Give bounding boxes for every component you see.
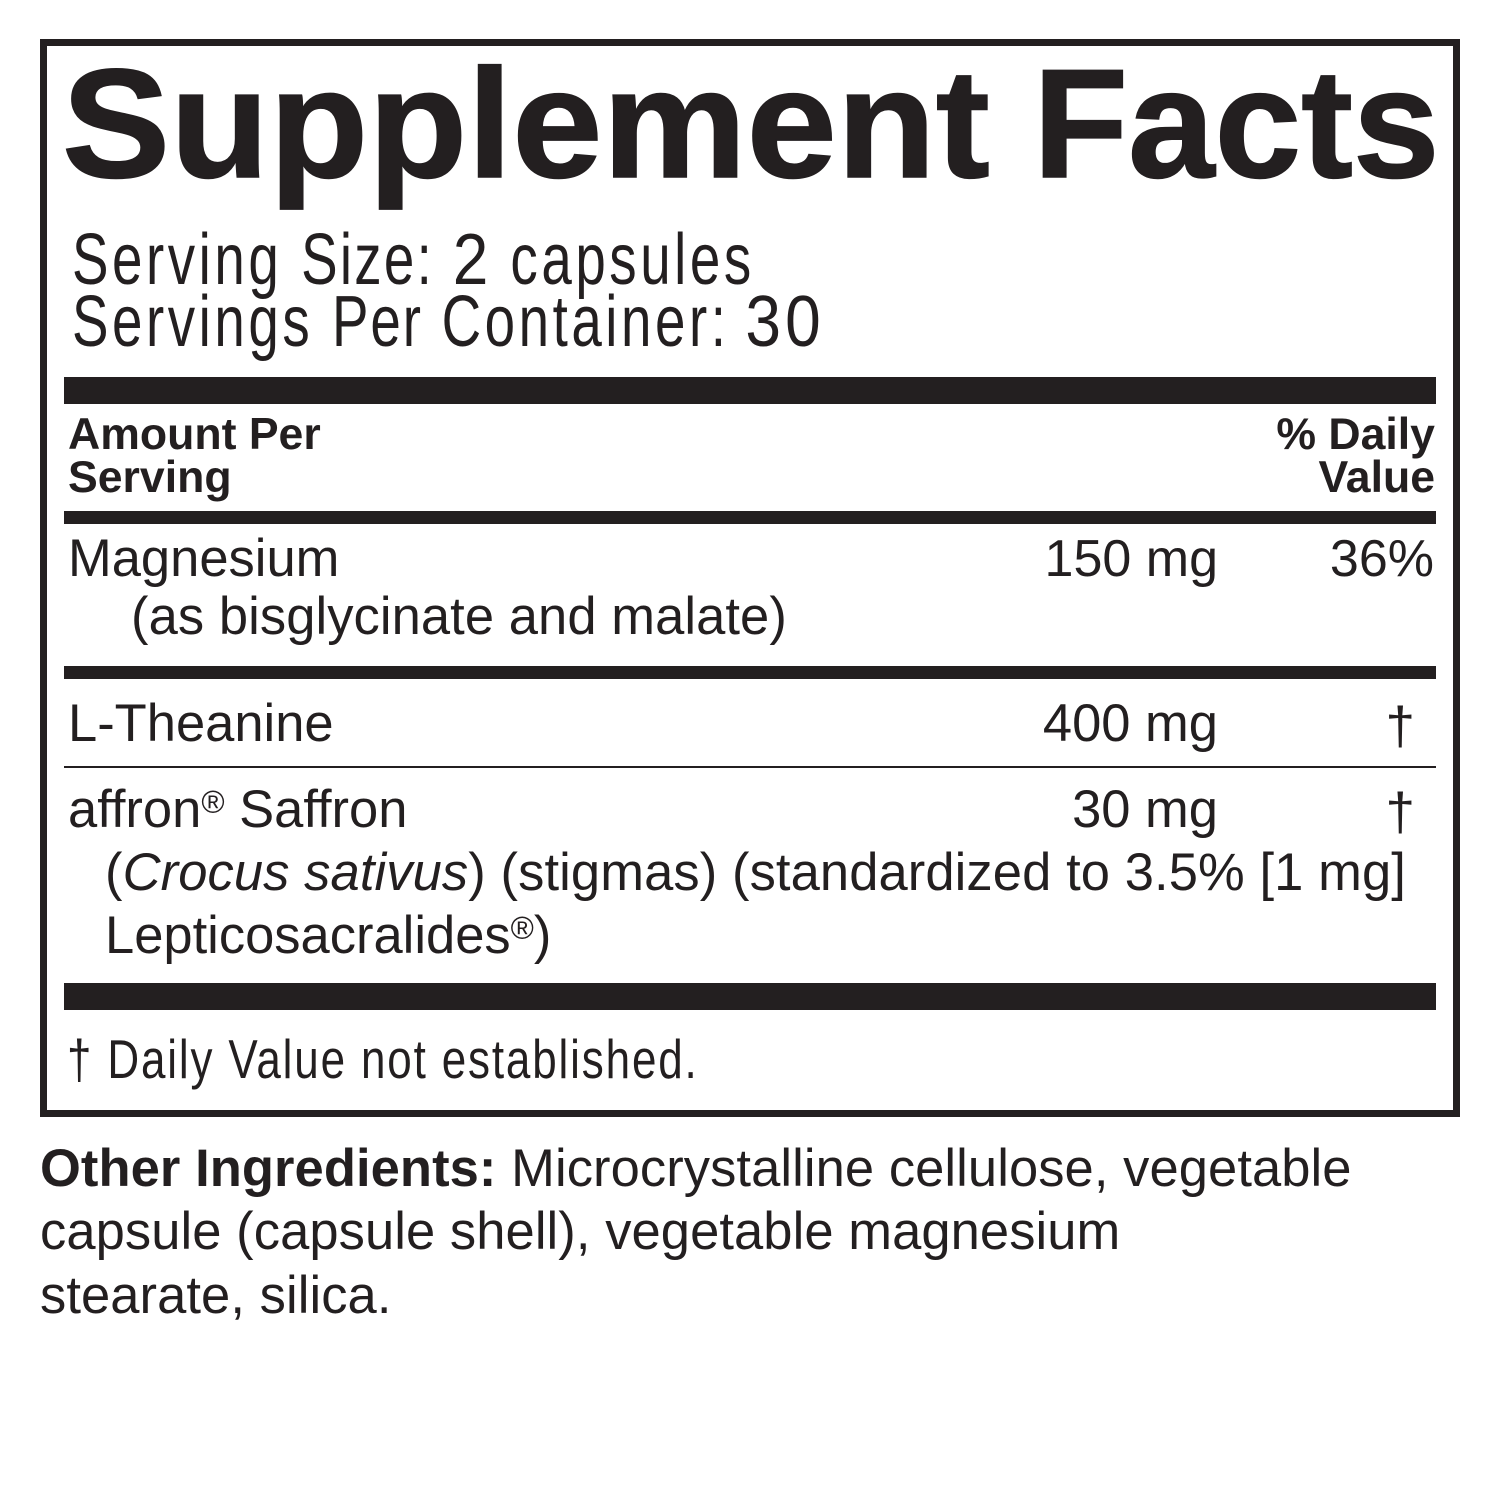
servings per container: 30 xyxy=(745,282,825,362)
magnesium form: (as bisglycinate and malate) xyxy=(131,587,787,646)
divider after magnesium xyxy=(64,666,1436,679)
column header: daily value: % Daily xyxy=(1276,410,1435,459)
l-theanine amount: 400 mg xyxy=(1043,694,1218,753)
thick divider bottom xyxy=(64,983,1436,1010)
row: l-theanine: L-Theanine xyxy=(68,694,334,753)
divider under header xyxy=(64,511,1436,524)
column header: amount per serving: Amount Per xyxy=(68,410,321,459)
affron dagger: † xyxy=(1386,783,1415,842)
column header: daily value: Value xyxy=(1318,452,1435,502)
footnote: † Daily Value not established. xyxy=(67,1028,699,1090)
thin divider xyxy=(64,766,1436,768)
affron description line 1: (Crocus sativus) (stigmas) (standardized to 3.5% [1 mg] xyxy=(105,843,1406,902)
serving size: 2 xyxy=(453,220,493,300)
thick divider top xyxy=(64,377,1436,404)
row: magnesium: Magnesium xyxy=(68,529,339,588)
title xyxy=(62,37,1440,210)
servings per container: Servings Per Container: xyxy=(72,282,727,362)
other ingredients xyxy=(40,1138,1352,1324)
affron amount: 30 mg xyxy=(1072,780,1218,839)
column header: amount per serving xyxy=(68,410,321,502)
other ingredients: capsule (capsule shell), vegetable magnesium xyxy=(40,1202,1120,1261)
affron description line 2: Lepticosacralides®) xyxy=(105,906,551,965)
title: Facts xyxy=(1033,37,1440,210)
column header: daily value xyxy=(1276,410,1435,502)
row: affron saffron: affron® Saffron xyxy=(68,780,407,839)
panel: supplement facts box xyxy=(40,39,1460,1117)
magnesium daily value: 36% xyxy=(1330,530,1434,588)
title: Supplement xyxy=(62,37,990,210)
column header: amount per serving: Serving xyxy=(68,452,232,502)
other ingredients: stearate, silica. xyxy=(40,1266,392,1324)
magnesium amount: 150 mg xyxy=(1045,530,1218,588)
serving size: Serving Size: capsules xyxy=(72,220,755,300)
other ingredients: Other Ingredients: Microcrystalline cellulose, vegetable xyxy=(40,1138,1352,1198)
l-theanine dagger: † xyxy=(1386,697,1415,756)
